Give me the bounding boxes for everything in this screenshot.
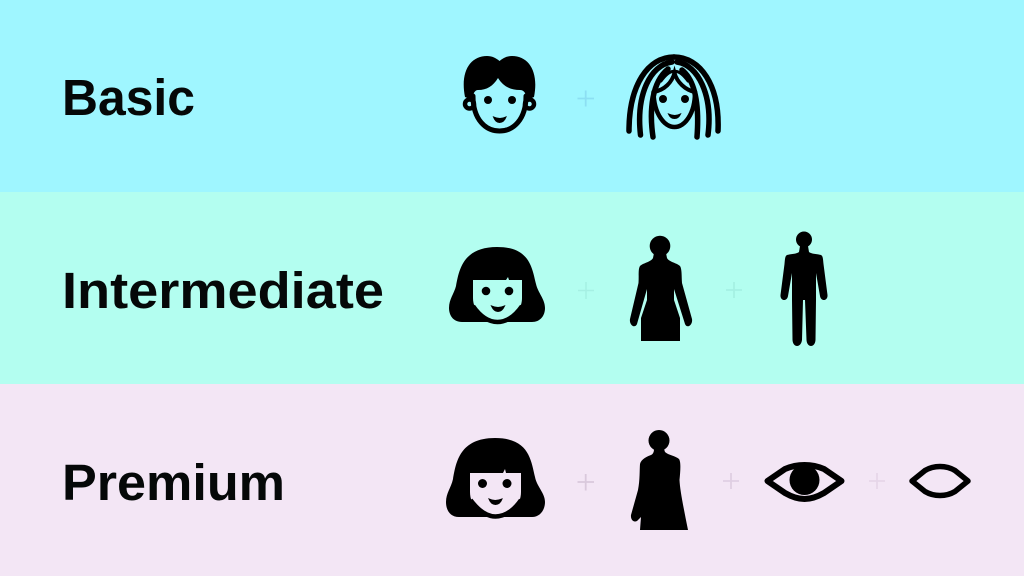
- icon: plus: [578, 474, 594, 490]
- panel: basic: [0, 0, 1024, 192]
- heading: premium: Premium: [62, 454, 285, 511]
- icon: boy face: [464, 56, 535, 131]
- heading: basic: Basic: [62, 69, 195, 126]
- icon: dress silhouette: [631, 430, 688, 530]
- icon: man silhouette: [780, 232, 828, 346]
- icon: plus: [723, 473, 739, 489]
- icon: long-haired face: [629, 57, 718, 137]
- icon: plus: [578, 90, 594, 106]
- icon: bob-haired face: [446, 438, 545, 517]
- panel: premium: [0, 384, 1024, 576]
- icon: plus: [869, 473, 885, 489]
- icon: plus: [578, 282, 594, 299]
- heading: intermediate: Intermediate: [62, 262, 384, 319]
- icon: plus: [726, 282, 742, 298]
- panel: intermediate: [0, 192, 1024, 384]
- icon: empty eye outline: [912, 466, 968, 496]
- icon: woman silhouette: [630, 236, 692, 341]
- icon: eye with iris: [768, 465, 842, 499]
- icon: bob-haired face: [449, 247, 545, 322]
